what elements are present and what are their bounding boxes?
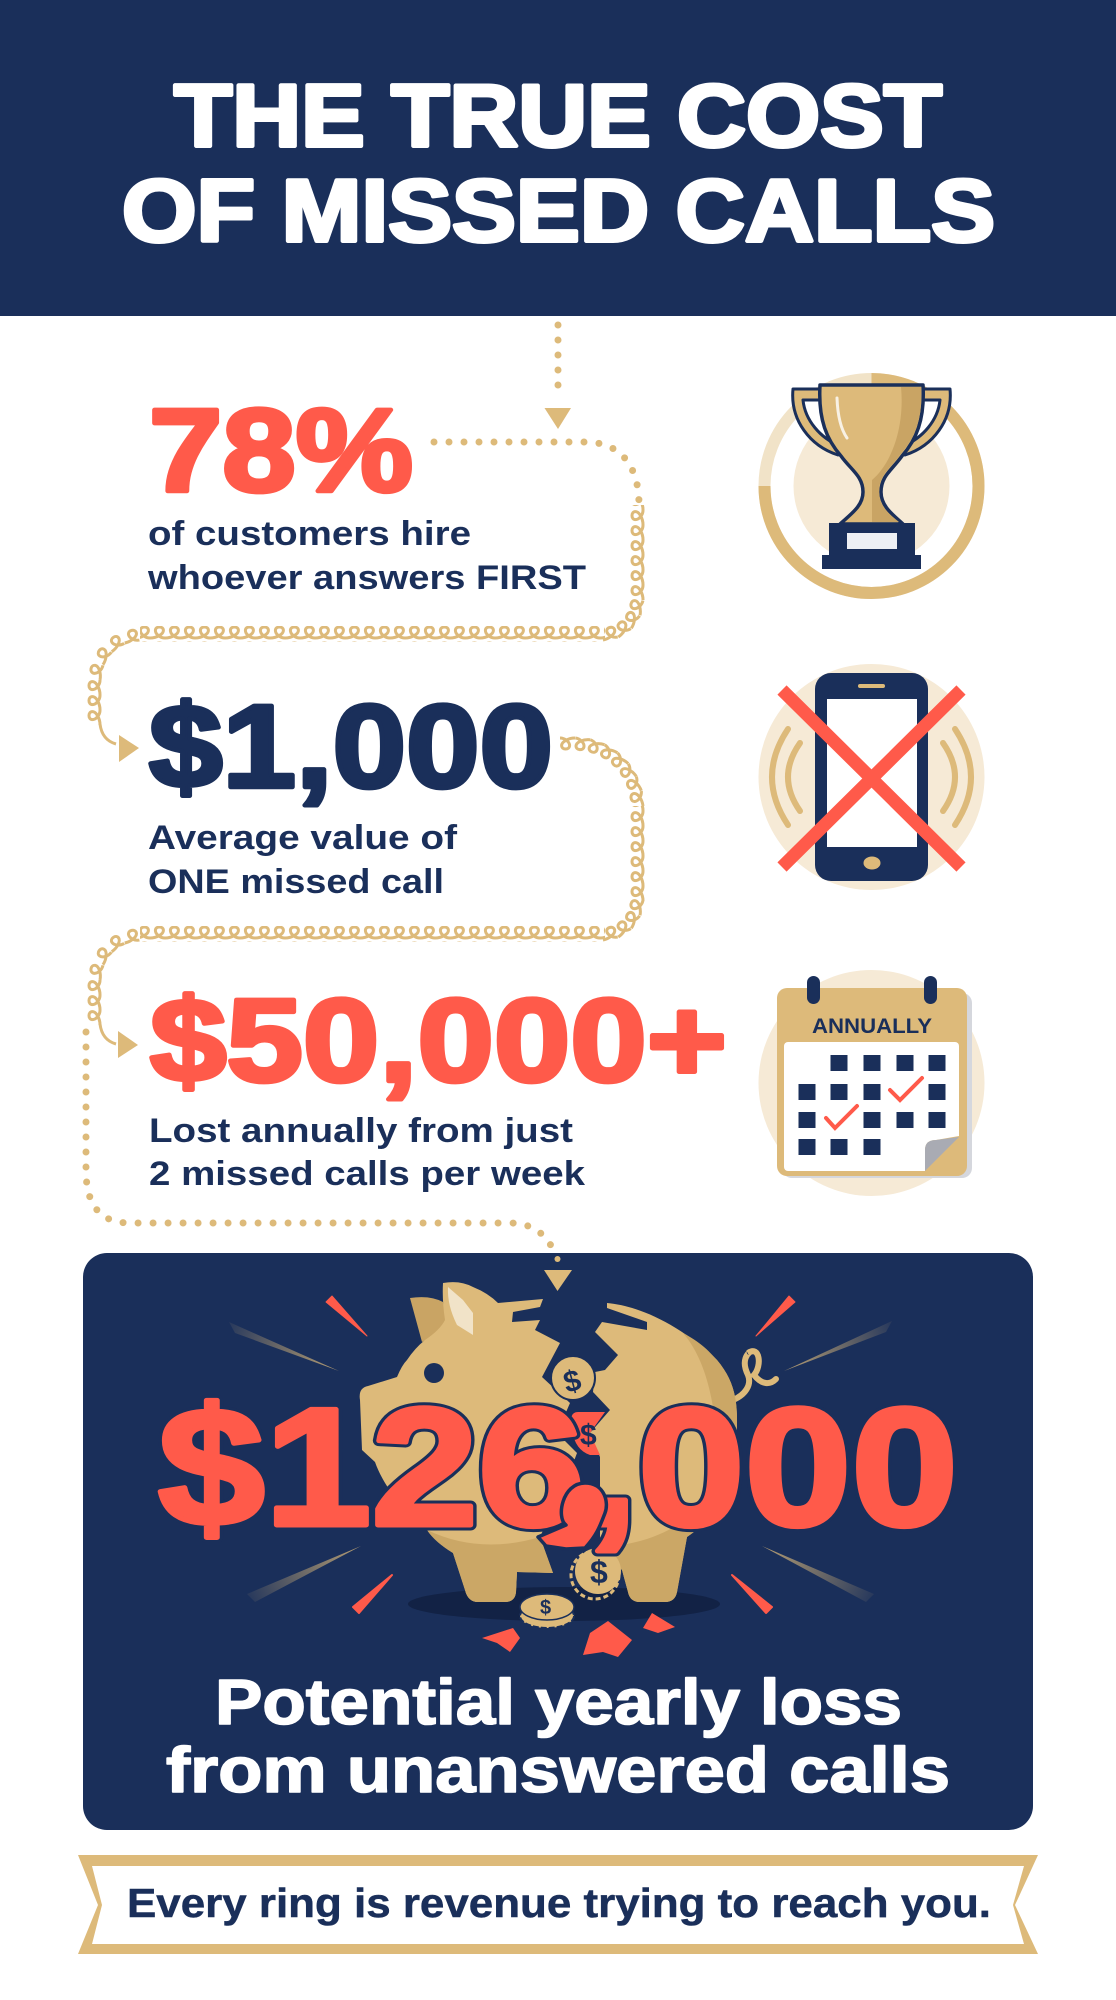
icon: annual calendar xyxy=(758,970,984,1196)
connector: dotted path to total panel xyxy=(86,1032,557,1262)
illustration: broken piggy bank xyxy=(360,1282,776,1657)
ribbon tagline: Every ring is revenue trying to reach you. xyxy=(127,1880,991,1926)
icon: trophy xyxy=(764,379,978,593)
dots and arrow into panel xyxy=(544,1256,572,1291)
connector: coiled phone cord to $50,000+ xyxy=(86,738,645,1058)
stat description: Average value of xyxy=(148,819,458,857)
stat: 78%: 78% xyxy=(149,385,413,517)
title: THE TRUE COST xyxy=(174,66,942,165)
stat description: ONE missed call xyxy=(148,863,444,901)
coin on the floor xyxy=(520,1594,574,1628)
panel caption: Potential yearly loss xyxy=(215,1666,902,1738)
coin on the floor: $ xyxy=(540,1597,551,1619)
panel caption: from unanswered calls xyxy=(166,1734,950,1806)
connector: coiled phone cord to $1,000 xyxy=(86,505,645,762)
header band xyxy=(0,0,1116,316)
ribbon tagline xyxy=(78,1855,1038,1954)
panel: total loss xyxy=(83,1253,1033,1830)
stat: 78% xyxy=(147,385,586,597)
icon: annual calendar: ANNUALLY xyxy=(812,1015,932,1038)
stat description: of customers hire xyxy=(148,515,471,553)
stat: $1,000: $1,000 xyxy=(149,681,553,813)
pig left half xyxy=(360,1282,577,1602)
title: OF MISSED CALLS xyxy=(122,161,995,260)
stat description xyxy=(148,819,458,901)
icon: crossed-out phone xyxy=(758,664,984,890)
burst rays xyxy=(229,1296,892,1613)
title xyxy=(122,66,995,260)
pig back ear xyxy=(410,1297,450,1342)
big number: $126,000 xyxy=(158,1373,958,1561)
broken coral coin in crack: $ xyxy=(580,1419,597,1452)
falling coin: $ xyxy=(590,1554,608,1590)
stat: $50,000+ xyxy=(149,975,727,1193)
panel caption xyxy=(166,1666,950,1806)
connector: dotted entry arrow into first stat xyxy=(544,325,571,429)
pig right half xyxy=(590,1303,737,1602)
broken coral coin in crack xyxy=(571,1412,605,1455)
connector: dotted path from 78% xyxy=(434,442,639,505)
stat description xyxy=(149,1112,585,1193)
coin in crack xyxy=(551,1356,595,1400)
pig left lower shading xyxy=(427,1530,553,1602)
falling coin xyxy=(571,1548,621,1599)
stat description xyxy=(147,515,586,597)
coral shards xyxy=(482,1613,675,1657)
stat: $1,000 xyxy=(148,681,553,901)
stat description: Lost annually from just xyxy=(149,1112,573,1150)
stat description: 2 missed calls per week xyxy=(149,1155,585,1193)
coin in crack: $ xyxy=(560,1364,585,1400)
stat: $50,000+: $50,000+ xyxy=(150,975,727,1107)
stat description: whoever answers FIRST xyxy=(147,559,586,597)
pig right shading xyxy=(600,1333,737,1602)
pig eye xyxy=(424,1363,444,1383)
pig tail xyxy=(733,1351,776,1400)
big number: $126,000 xyxy=(158,1373,958,1561)
enlarged cracked comma xyxy=(538,1483,606,1549)
pig ear highlight xyxy=(448,1287,473,1335)
